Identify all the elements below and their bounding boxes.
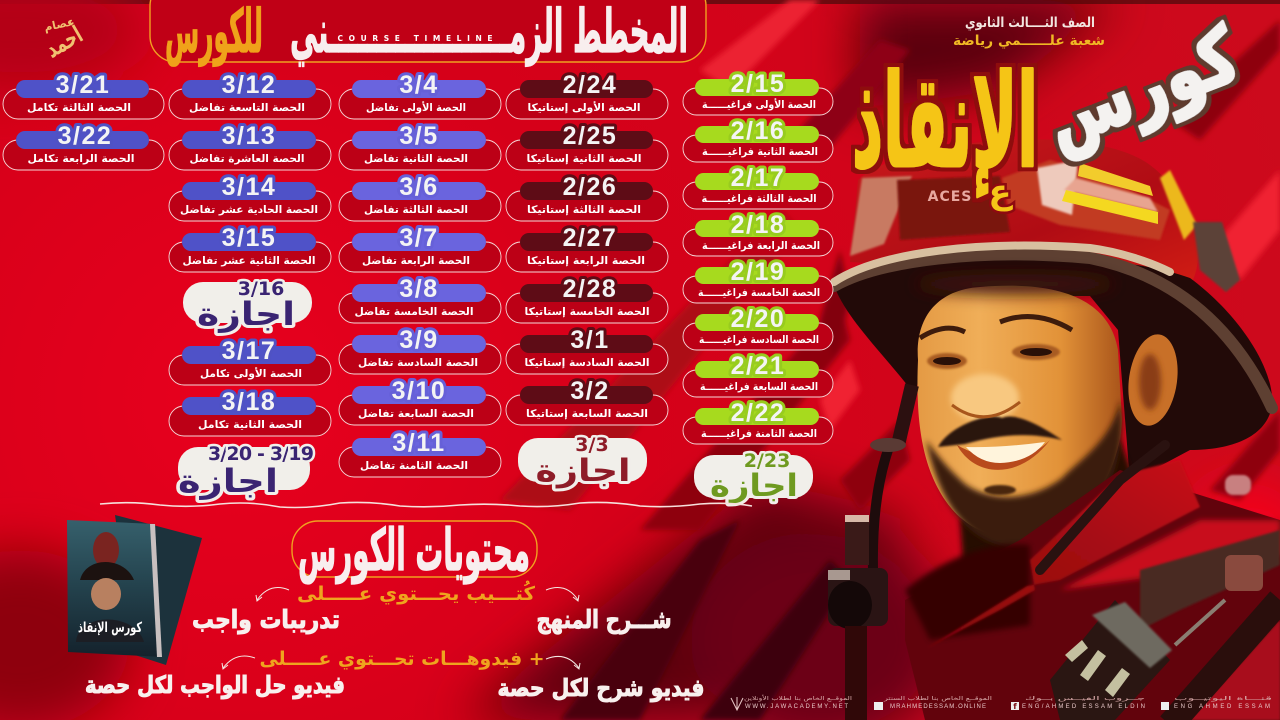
item: homework video: فيديو حل الواجب لكل حصة: [85, 671, 345, 699]
lesson 2/21: الحصة السابعة فراغيــــــة: [700, 381, 818, 393]
lesson 3/6: [339, 173, 501, 221]
lesson 3/17: [169, 337, 331, 385]
videos subtitle: + فيدوهـــات تحـــتوي عـــــلى: [260, 648, 544, 671]
lesson 3/22: [3, 122, 164, 170]
helmet dome: ACES: [928, 189, 972, 205]
lesson 3/2: [506, 377, 668, 425]
lesson 2/28: [506, 275, 668, 323]
grade text: شعبة علــــــمي رياضة: [953, 33, 1105, 49]
logo: عصام: [43, 15, 76, 34]
heading: course name: الإنقاذ: [852, 48, 1038, 198]
lesson 2/25: 2/25: [563, 122, 617, 150]
divider: wavy line: [100, 502, 752, 508]
front book: [67, 520, 162, 657]
lesson 3/18: [169, 388, 331, 436]
person: firefighter: [828, 139, 1280, 720]
lesson 3/18: 3/18: [222, 388, 276, 416]
lesson 3/13: [169, 122, 331, 170]
lesson 2/15: 2/15: [731, 70, 785, 98]
lesson 3/10: الحصة السابعة تفاضل: [358, 408, 474, 420]
lesson 3/7: 3/7: [399, 224, 439, 252]
front book: كورس الإنقاذ: [78, 620, 143, 636]
microphone and cable: [828, 385, 912, 720]
lesson 3/12: الحصة التاسعة تفاضل: [189, 102, 305, 114]
lesson 2/20: 2/20: [731, 305, 785, 333]
lesson 2/20: [683, 305, 833, 350]
title: timeline: COURSE TIMELINE: [338, 34, 492, 43]
column: maroon dates: [506, 71, 668, 489]
facebook link: [1011, 696, 1147, 711]
holiday 3/3: 3/3: [575, 434, 609, 456]
lesson 2/17: 2/17: [731, 164, 785, 192]
arrow: right booklet: [546, 588, 579, 601]
booklet subtitle: كُتـــيب يحـــتوي عـــــلى: [297, 580, 536, 606]
column: final dates: [3, 71, 164, 170]
holiday 2/23: 2/23: [744, 450, 790, 472]
lesson 3/21: 3/21: [56, 71, 110, 99]
lesson 2/24: الحصة الأولى إستاتيكا: [528, 101, 640, 114]
jacket: [905, 445, 1280, 720]
lesson 3/5: 3/5: [399, 122, 439, 150]
lesson 3/12: 3/12: [222, 71, 276, 99]
lesson 3/10: [339, 377, 501, 425]
lesson 3/5: الحصة الثانية تفاضل: [364, 153, 468, 165]
lesson 2/20: الحصة السادسة فراغيــــــة: [699, 334, 819, 346]
lesson 2/16: الحصة الثانية فراغيــــــة: [702, 146, 818, 158]
lesson 3/18: الحصة الثانية تكامل: [198, 419, 302, 431]
lesson 2/15: الحصة الأولى فراغيــــــة: [702, 98, 816, 111]
face: [915, 274, 1122, 548]
lesson 2/28: 2/28: [563, 275, 617, 303]
lesson 3/1: [506, 326, 668, 374]
instagram link: [874, 696, 993, 710]
grade text: [953, 15, 1105, 49]
lesson 3/13: 3/13: [222, 122, 276, 150]
lesson 3/7: الحصة الرابعة تفاضل: [362, 255, 470, 267]
holiday 2/23: [694, 450, 813, 504]
helmet dome: [850, 139, 1240, 292]
lesson 2/24: [506, 71, 668, 119]
lesson 2/22: الحصة الثامنة فراغيــــــة: [701, 428, 817, 440]
lesson 3/4: [339, 71, 501, 119]
item: curriculum explanation: شـــرح المنهج: [536, 605, 672, 635]
lesson 2/19: الحصة الخامسة فراغيــــــة: [698, 287, 820, 299]
radio device: [1050, 555, 1263, 720]
lesson 3/8: 3/8: [399, 275, 439, 303]
footer links: [731, 694, 1273, 711]
lesson 2/22: [683, 399, 833, 444]
neck shadow: [960, 440, 1135, 595]
lesson 2/17: [683, 164, 833, 209]
holiday 3/3: [518, 434, 647, 489]
lesson 3/9: [339, 326, 501, 374]
lesson 3/6: الحصة الثالثة تفاضل: [364, 204, 468, 216]
lesson 2/18: [683, 211, 833, 256]
lesson 2/18: 2/18: [731, 211, 785, 239]
lesson 3/8: الحصة الخامسة تفاضل: [354, 306, 474, 318]
lesson 3/2: 3/2: [570, 377, 610, 405]
item: homework drills: تدريبات واجب: [192, 605, 340, 635]
lesson 2/24: 2/24: [563, 71, 617, 99]
instagram link: الموقــع الخاص بنا لطلاب السنتر: [883, 696, 993, 702]
lesson 3/8: [339, 275, 501, 323]
column: green dates: [683, 70, 833, 504]
holiday 3/3: اجازة: [536, 453, 630, 489]
lesson 3/4: الحصة الأولى تفاضل: [366, 101, 466, 114]
lesson 3/21: [3, 71, 164, 119]
holiday 3/19 - 3/20: [178, 443, 314, 500]
logo: أحمد: [40, 19, 87, 64]
youtube link: قنـــاة اليوتيــوب: [1174, 696, 1273, 702]
holiday 3/16: اجازة: [197, 295, 295, 333]
lesson 3/9: 3/9: [399, 326, 439, 354]
lesson 3/14: [169, 173, 331, 221]
holiday 2/23: اجازة: [710, 468, 798, 504]
lesson 2/16: 2/16: [731, 117, 785, 145]
holiday 3/19 - 3/20: 3/20 - 3/19: [208, 443, 314, 465]
holiday 3/16: 3/16: [238, 278, 284, 300]
lesson 3/2: الحصة السابعة إستاتيكا: [526, 408, 648, 420]
lesson 2/19: [683, 258, 833, 303]
lesson 3/4: 3/4: [399, 71, 439, 99]
lesson 3/11: [339, 429, 501, 477]
lesson 2/15: [683, 70, 833, 115]
holiday 3/16: [183, 278, 312, 333]
lesson 2/18: الحصة الرابعة فراغيــــــة: [702, 240, 820, 252]
instagram link: MRAHMEDESSAM.ONLINE: [890, 704, 988, 710]
lesson 3/9: الحصة السادسة تفاضل: [358, 357, 478, 369]
lesson 2/19: 2/19: [731, 258, 785, 286]
holiday 3/19 - 3/20: اجازة: [178, 462, 278, 500]
lesson 3/21: الحصة الثالثة تكامل: [27, 102, 131, 114]
facebook link: f: [1013, 702, 1017, 711]
rear book: [115, 515, 202, 665]
youtube link: ENG AHMED ESSAM: [1174, 704, 1272, 710]
logo: [40, 15, 87, 64]
lesson 3/10: 3/10: [392, 377, 446, 405]
item: explanation video: فيديو شرح لكل حصة: [498, 674, 704, 702]
lesson 3/15: 3/15: [222, 224, 276, 252]
lesson 3/5: [339, 122, 501, 170]
lesson 3/11: الحصة الثامنة تفاضل: [360, 460, 468, 472]
lesson 3/15: الحصة الثانية عشر تفاضل: [182, 255, 316, 267]
lesson 2/27: الحصة الرابعة إستاتيكا: [527, 255, 645, 267]
lesson 3/14: الحصة الحادية عشر تفاضل: [180, 204, 318, 216]
website link: الموقــع الخاص بنا لطلاب الأونلاين: [744, 694, 853, 702]
lesson 3/13: الحصة العاشرة تفاضل: [190, 153, 304, 165]
book mockup: [67, 515, 202, 665]
heading: course contents: [292, 516, 537, 585]
lesson 2/25: [506, 122, 668, 170]
website link: [731, 694, 853, 710]
lesson 3/22: الحصة الرابعة تكامل: [28, 153, 134, 165]
lesson 3/7: [339, 224, 501, 272]
column: blue dates: [169, 71, 331, 500]
grade text: الصف الثــــالث الثانوي: [965, 15, 1095, 31]
infographic canvas: محتويات الكورس: [298, 516, 530, 585]
facebook link: ENG/AHMED ESSAM ELDIN: [1022, 704, 1147, 710]
lesson 2/26: الحصة الثالثة إستاتيكا: [527, 204, 641, 216]
arrow: right videos: [546, 656, 580, 669]
lesson 3/17: الحصة الأولى تكامل: [200, 367, 302, 380]
lesson 3/1: 3/1: [570, 326, 610, 354]
lesson 2/21: 2/21: [731, 352, 785, 380]
lesson 2/17: الحصة الثالثة فراغيــــــة: [702, 193, 816, 205]
lesson 3/11: 3/11: [392, 429, 446, 457]
lesson 2/21: [683, 352, 833, 397]
lesson 2/26: [506, 173, 668, 221]
column: violet dates: [339, 71, 501, 477]
lesson 3/6: 3/6: [399, 173, 439, 201]
lesson 3/1: الحصة السادسة إستاتيكا: [524, 357, 650, 369]
helmet underside: [835, 258, 1272, 482]
helmet brim: [834, 246, 1272, 408]
lesson 3/22: 3/22: [58, 122, 112, 150]
icon: helmet letter: ع: [988, 172, 1013, 212]
lesson 3/17: 3/17: [222, 337, 276, 365]
facebook link: جــروب الفيــس بــوك: [1025, 696, 1145, 702]
arrow: left videos: [222, 656, 255, 669]
title: timeline: [150, 0, 706, 67]
lesson 2/25: الحصة الثانية إستاتيكا: [526, 153, 642, 165]
lesson 2/27: [506, 224, 668, 272]
lesson 2/16: [683, 117, 833, 162]
lesson 2/22: 2/22: [731, 399, 785, 427]
ear: [1123, 331, 1183, 429]
lesson 3/15: [169, 224, 331, 272]
lesson 2/28: الحصة الخامسة إستاتيكا: [524, 306, 650, 318]
arrow: left booklet: [256, 588, 289, 601]
lesson 3/12: [169, 71, 331, 119]
lesson 3/14: 3/14: [222, 173, 276, 201]
website link: WWW.JAWACADEMY.NET: [745, 704, 850, 710]
youtube link: [1161, 696, 1273, 710]
lesson 2/27: 2/27: [563, 224, 617, 252]
lesson 2/26: 2/26: [563, 173, 617, 201]
